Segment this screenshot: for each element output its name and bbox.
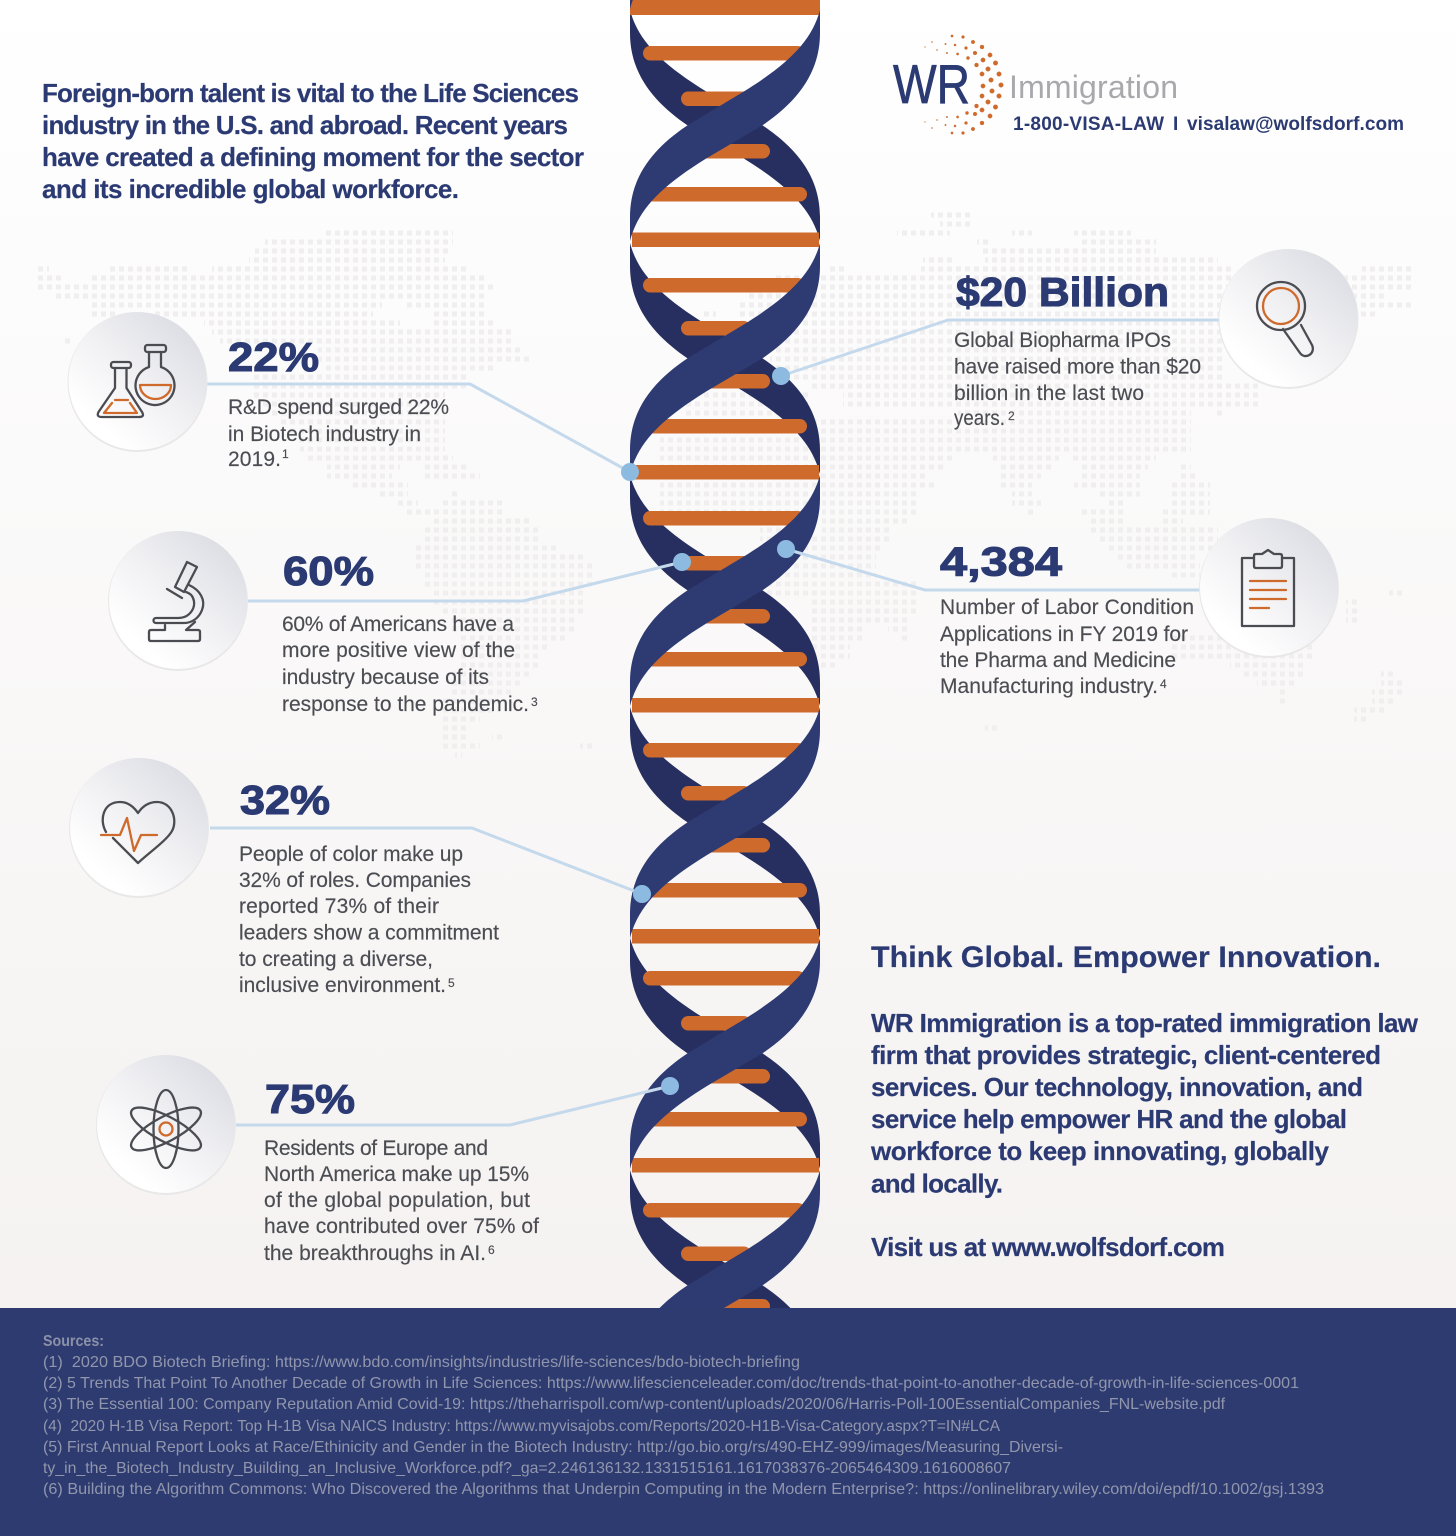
orange base-pair rungs bbox=[630, 0, 820, 1314]
tagline heading: Think Global. Empower Innovation. bbox=[871, 941, 1381, 974]
connector lines bbox=[207, 320, 1220, 1125]
stat description: North America make up 15% bbox=[264, 1163, 529, 1186]
intro heading: Foreign-born talent is vital to the Life Sciences bbox=[42, 78, 579, 108]
stat description bbox=[954, 329, 1201, 430]
stat description: of the global population, but bbox=[264, 1189, 530, 1212]
intro heading: industry in the U.S. and abroad. Recent years bbox=[42, 110, 568, 140]
stat panel: 60% bbox=[108, 531, 538, 716]
icon: flasks bbox=[68, 312, 208, 452]
stat description: have raised more than $20 bbox=[954, 356, 1201, 378]
stat description: 4 bbox=[1160, 677, 1167, 691]
stat description: Residents of Europe and bbox=[264, 1137, 488, 1160]
stat description: Number of Labor Condition bbox=[940, 596, 1194, 619]
stat description: 5 bbox=[448, 976, 455, 990]
stat description: R&D spend surged 22% bbox=[228, 396, 449, 419]
firm description: firm that provides strategic, client-centered bbox=[871, 1040, 1381, 1070]
firm description: and locally. bbox=[871, 1168, 1003, 1198]
contact line: 1-800-VISA-LAW bbox=[1013, 114, 1164, 135]
stat description: 2 bbox=[1008, 409, 1015, 423]
source list bbox=[43, 1354, 1324, 1498]
stat description: response to the pandemic. bbox=[282, 693, 529, 716]
stat panel: $20 Billion bbox=[954, 249, 1358, 430]
stat number: 60% bbox=[283, 548, 374, 594]
logo: WR Immigration bbox=[893, 35, 1404, 135]
stat description: 1 bbox=[282, 447, 289, 461]
stat description bbox=[282, 613, 538, 716]
icon: magnifying glass bbox=[1218, 249, 1358, 389]
stat description: 6 bbox=[488, 1243, 495, 1257]
stat number: 4,384 bbox=[940, 538, 1062, 584]
stat description: have contributed over 75% of bbox=[264, 1215, 539, 1238]
front strands bbox=[630, 0, 820, 1401]
stat description: reported 73% of their bbox=[239, 895, 439, 918]
contact separator: I bbox=[1173, 114, 1178, 135]
icon: microscope bbox=[108, 531, 248, 671]
closing call to action bbox=[870, 941, 1419, 1262]
stat description: inclusive environment. bbox=[239, 974, 446, 997]
icon: atom bbox=[96, 1055, 236, 1195]
firm description: service help empower HR and the global bbox=[871, 1104, 1347, 1134]
stat description: the breakthroughs in AI. bbox=[264, 1242, 486, 1265]
stat description: more positive view of the bbox=[282, 639, 515, 662]
intro heading bbox=[42, 78, 584, 204]
stat number: 75% bbox=[265, 1076, 355, 1122]
stat description: industry because of its bbox=[282, 666, 489, 689]
stat description bbox=[264, 1137, 539, 1265]
stat description: 3 bbox=[531, 695, 538, 709]
stat description bbox=[940, 596, 1194, 698]
contact email: visalaw@wolfsdorf.com bbox=[1187, 114, 1404, 135]
stat panel: 22% bbox=[68, 312, 449, 471]
stat description: the Pharma and Medicine bbox=[940, 649, 1176, 672]
stat number: 22% bbox=[228, 334, 319, 380]
stat description: Manufacturing industry. bbox=[940, 675, 1158, 698]
source list: (3) The Essential 100: Company Reputation Amid Covid-19: https://theharrispoll.com/wp-content/uploads/2020/06/Harris-Poll-100EssentialCompanies_FNL-website.pdf bbox=[43, 1396, 1226, 1413]
connector end dots on the helix bbox=[621, 367, 795, 1095]
stat description: 2019. bbox=[228, 448, 281, 471]
logo word Immigration: Immigration bbox=[1009, 69, 1178, 105]
stat description: to creating a diverse, bbox=[239, 948, 433, 971]
intro heading: and its incredible global workforce. bbox=[42, 174, 459, 204]
website link: Visit us at www.wolfsdorf.com bbox=[871, 1232, 1225, 1262]
source list: (4) 2020 H-1B Visa Report: Top H-1B Visa NAICS Industry: https://www.myvisajobs.com/Reports/2020-H1B-Visa-Category.aspx?T=IN#LCA bbox=[43, 1418, 1000, 1435]
firm description bbox=[870, 1008, 1419, 1198]
stat panel: 75% bbox=[96, 1055, 539, 1265]
logo letters WR: WR bbox=[893, 53, 970, 115]
source list: ty_in_the_Biotech_Industry_Building_an_Inclusive_Workforce.pdf?_ga=2.246136132.1331515161.1617038376-2065464309.1616008607 bbox=[43, 1460, 1011, 1477]
icon: clipboard bbox=[1199, 518, 1339, 658]
footer panel: sources bbox=[0, 1308, 1456, 1536]
stat description: leaders show a commitment bbox=[239, 922, 499, 944]
stat description: People of color make up bbox=[239, 843, 463, 866]
source list: (6) Building the Algorithm Commons: Who Discovered the Algorithms that Underpin Computing in the Modern Enterprise?: https://onlinelibrary.wiley.com/doi/epdf/10.1002/gsj.1393 bbox=[43, 1481, 1324, 1498]
firm description: WR Immigration is a top-rated immigration law bbox=[871, 1008, 1419, 1038]
icon: heart with pulse bbox=[69, 758, 209, 898]
stat description: Applications in FY 2019 for bbox=[940, 623, 1188, 646]
stat description bbox=[239, 843, 499, 997]
DNA double helix bbox=[630, 0, 820, 1401]
stat panel: 32% bbox=[69, 758, 499, 997]
stat number: 32% bbox=[240, 777, 330, 823]
source list: (5) First Annual Report Looks at Race/Ethinicity and Gender in the Biotech Industry: http://go.bio.org/rs/490-EHZ-999/images/Measuring_Diversi- bbox=[43, 1439, 1063, 1456]
source list: (2) 5 Trends That Point To Another Decade of Growth in Life Sciences: https://www.lifescienceleader.com/doc/trends-that-point-to-another-decade-of-growth-in-life-sciences-0001 bbox=[43, 1375, 1299, 1392]
firm description: workforce to keep innovating, globally bbox=[870, 1136, 1330, 1166]
stat panel: 4,384 bbox=[940, 518, 1339, 698]
dotted world map background bbox=[37, 210, 1412, 760]
stat description bbox=[228, 396, 449, 471]
stat description: Global Biopharma IPOs bbox=[954, 329, 1171, 352]
stat description: 32% of roles. Companies bbox=[239, 869, 471, 892]
back strands bbox=[630, 0, 820, 1401]
stat description: 60% of Americans have a bbox=[282, 613, 514, 636]
firm description: services. Our technology, innovation, and bbox=[871, 1072, 1363, 1102]
stat description: years. bbox=[954, 407, 1005, 430]
logo dotted arc bbox=[924, 35, 1003, 134]
intro heading: have created a defining moment for the sector bbox=[42, 142, 584, 172]
source list: (1) 2020 BDO Biotech Briefing: https://www.bdo.com/insights/industries/life-sciences/bdo-biotech-briefing bbox=[43, 1354, 800, 1371]
sources heading: Sources: bbox=[43, 1333, 104, 1350]
stat description: in Biotech industry in bbox=[228, 423, 421, 446]
stat number: $20 Billion bbox=[956, 269, 1169, 315]
stat description: billion in the last two bbox=[954, 382, 1144, 405]
